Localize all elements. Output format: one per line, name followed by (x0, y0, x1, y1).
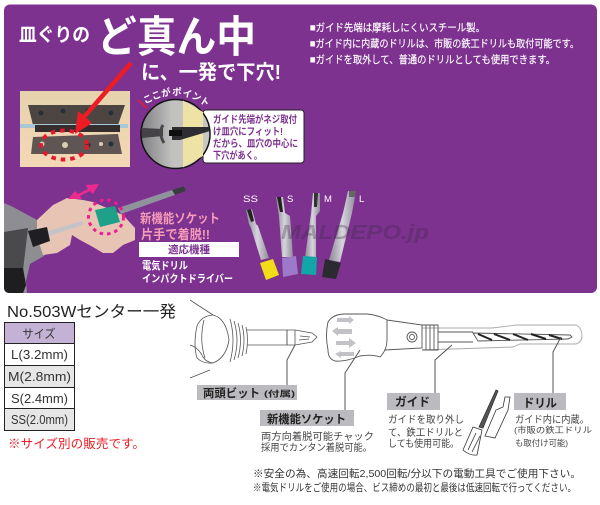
heading: main title: 皿ぐりの (19, 24, 90, 46)
label: koko ga point: が (160, 86, 172, 100)
table: size list: SS(2.0mm) (11, 412, 68, 427)
table: size list: サイズ (22, 326, 56, 341)
text block: feature bullets: ■ガイド先端は摩耗しにくいスチール製。 (310, 21, 485, 34)
text block: guide description (388, 414, 464, 450)
label: drill: ドリル (523, 396, 557, 410)
arrow: red pointer (75, 63, 131, 134)
arrow: pink two-way (68, 184, 99, 199)
table: size list: S(2.4mm) (11, 391, 68, 406)
callout: guide tip explanation: だから、皿穴の中心に (213, 137, 298, 150)
label: compatible machines (139, 242, 239, 257)
marker: red dotted circle (41, 130, 87, 160)
watermark: MALDEPO.jp (281, 222, 429, 244)
label: double-ended bit: (付属) (264, 388, 295, 398)
text block: socket description (261, 430, 374, 454)
leader: bit (287, 345, 295, 385)
leader: socket (345, 350, 360, 410)
label: guide (387, 393, 440, 410)
product photo: size L (322, 191, 364, 279)
text block: drill description: ガイド内に内蔵。 (515, 413, 589, 426)
product photo: size L: L (359, 194, 364, 205)
product photo: size SS: SS (243, 194, 258, 205)
heading: main title: ど真ん中 (97, 14, 256, 62)
label: koko ga point: ト (197, 95, 211, 110)
label: double-ended bit (197, 385, 297, 400)
icon: socket arrows (332, 316, 356, 358)
label: koko ga point: ン (190, 91, 203, 104)
diagram: drill chuck and double-ended bit (190, 300, 317, 378)
text block: socket headline: 新機能ソケット (140, 211, 220, 226)
heading: main title: に、一発で下穴! (141, 61, 281, 84)
text block: drill description: (市販の鉄工ドリル (514, 425, 593, 435)
product photo: size M: M (324, 194, 332, 205)
label: drill (514, 393, 566, 410)
photo: guide tip closeup circle (141, 100, 210, 168)
text block: socket description: 採用でカンタン着脱可能。 (261, 441, 372, 454)
text block: guide description: ガイドを取り外し (388, 414, 464, 426)
text block: socket description: 両方向着脱可能チャック (261, 430, 374, 443)
label: koko ga point: こ (142, 93, 155, 107)
text block: machines list: 電気ドリル (142, 259, 188, 272)
text block: socket headline: 片手で着脱!! (141, 227, 210, 242)
marker: pink dotted circle (88, 200, 124, 234)
photo: hand holding drill (4, 184, 186, 293)
product photo: size S: S (287, 194, 293, 205)
callout: guide tip explanation: け皿穴にフィット! (213, 125, 283, 138)
text block: feature bullets (310, 21, 579, 66)
label: double-ended bit: 両頭ビット (203, 386, 260, 400)
diagram: socket, guide and drill (326, 314, 582, 361)
label: koko ga point: ポ (172, 87, 182, 98)
table: size list: L(3.2mm) (11, 347, 68, 362)
photo: hinge with countersunk holes (20, 91, 130, 167)
label: new socket: 新機能ソケット (267, 412, 346, 426)
text block: machines list (142, 259, 233, 285)
label: koko ga point (138, 86, 211, 110)
heading: product name: No.503Wセンター一発 (7, 303, 176, 321)
callout: guide tip explanation (203, 110, 304, 163)
table: size list: M(2.8mm) (8, 369, 71, 384)
product photo: size SS (243, 194, 279, 280)
label: koko ga point: こ (150, 89, 163, 103)
product photo: size S (276, 194, 298, 277)
socket: green grip (95, 206, 120, 227)
text block: guide description: しても使用可能。 (388, 437, 459, 450)
text block: drill description (514, 413, 593, 448)
text block: socket headline (140, 211, 220, 242)
callout: guide tip explanation: 下穴があく。 (213, 149, 262, 162)
text block: machines list: インパクトドライバー (142, 273, 233, 285)
leader: guide (435, 345, 452, 393)
note: sold by size: ※サイズ別の販売です。 (8, 436, 145, 451)
label: compatible machines: 適応機種 (168, 243, 210, 256)
text block: drill description: も取付け可能) (515, 438, 568, 448)
heading: main title (19, 14, 281, 84)
product photo: size M (301, 193, 332, 275)
icon: removed guide and drill (463, 390, 510, 455)
text block: guide description: て、鉄工ドリルと (388, 426, 463, 439)
text block: safety notes (253, 467, 581, 494)
text block: safety notes: ※安全の為、高速回転2,500回転/分以下の電動工具でご使用下さい。 (253, 467, 581, 480)
table: size list (4, 322, 74, 430)
leader: drill (553, 337, 561, 393)
callout: guide tip explanation: ガイド先端がネジ取付 (213, 113, 297, 126)
label: koko ga point: イ (181, 88, 193, 101)
panel: purple banner (4, 4, 597, 293)
text block: feature bullets: ■ガイドを取外して、普通のドリルとしても使用できます。 (310, 53, 555, 66)
label: guide: ガイド (395, 394, 430, 409)
label: new socket (260, 410, 354, 426)
